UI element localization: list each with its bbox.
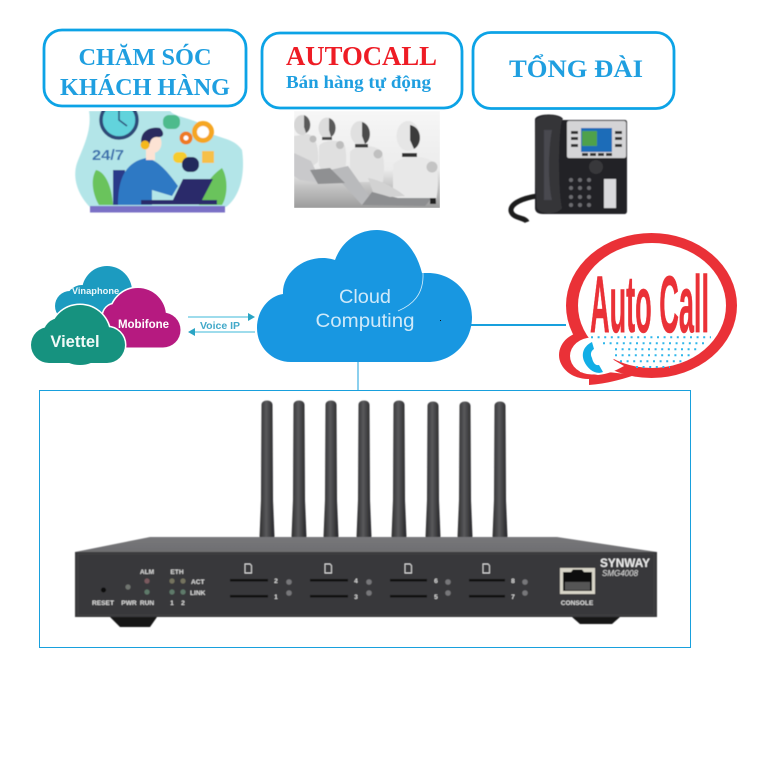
status LEDs xyxy=(125,578,528,596)
panel labels: LINK xyxy=(190,590,206,597)
panel labels: 6 xyxy=(434,578,438,585)
device frame xyxy=(40,390,690,648)
chassis xyxy=(75,537,657,617)
cloud: Vinaphone: Vinaphone xyxy=(72,286,119,296)
panel labels: RUN xyxy=(140,600,154,607)
console port xyxy=(560,568,595,594)
heading box: PBX: TỔNG ĐÀI xyxy=(509,54,643,83)
rubber feet xyxy=(110,617,620,627)
panel labels xyxy=(92,569,594,607)
cloud: Viettel: Viettel xyxy=(50,333,100,351)
connector: cloud to Auto Call xyxy=(470,324,566,326)
panel labels: PWR xyxy=(121,600,137,607)
icon: phone handset xyxy=(583,342,603,373)
panel labels: 1 xyxy=(274,594,278,601)
main cloud: Cloud Computing xyxy=(257,230,472,362)
heading box: customer care: KHÁCH HÀNG xyxy=(60,75,230,101)
reset button xyxy=(101,588,106,592)
heading box: customer care: CHĂM SÓC xyxy=(78,44,212,71)
heading box: autocall: Bán hàng tự động xyxy=(286,72,431,92)
panel labels: 7 xyxy=(511,594,515,601)
illustration: call center agent 24/7: 24/7 xyxy=(92,147,124,164)
cloud: Mobifone: Mobifone xyxy=(118,319,169,331)
network clouds: Vinaphone, Mobifone, Viettel xyxy=(31,266,180,365)
connector: cloud to device frame xyxy=(357,362,359,391)
photo: robots with laptops xyxy=(294,111,440,208)
panel labels: 4 xyxy=(354,578,358,585)
heading box: customer care xyxy=(44,30,246,106)
panel labels: RESET xyxy=(92,600,114,607)
panel labels: ALM xyxy=(140,569,155,576)
brand: Synway: SYNWAY xyxy=(600,558,650,570)
cloud: Viettel xyxy=(31,305,125,365)
model number: SMG4008 xyxy=(602,569,639,578)
device: Synway SMG4008 gateway xyxy=(75,400,657,627)
panel labels: 1 xyxy=(170,600,174,607)
cloud: Vinaphone xyxy=(55,266,132,321)
arrows and label: Voice IP xyxy=(188,313,255,336)
heading box: autocall xyxy=(262,33,462,108)
illustration: call center agent 24/7 xyxy=(75,102,243,212)
SIM icons xyxy=(245,564,490,573)
arrows and label: Voice IP: Voice IP xyxy=(200,320,240,332)
panel labels: 8 xyxy=(511,578,515,585)
panel labels: ETH xyxy=(170,569,184,576)
SIM slots xyxy=(230,579,505,598)
main cloud: Cloud Computing: Computing xyxy=(316,311,414,332)
heading box: PBX xyxy=(473,32,674,108)
logo: Auto Call speech bubble xyxy=(559,233,737,385)
panel labels: 2 xyxy=(274,578,278,585)
panel labels: CONSOLE xyxy=(561,600,594,607)
heading box: autocall: AUTOCALL xyxy=(286,41,437,71)
cloud: Mobifone xyxy=(103,288,180,348)
photo: desk IP phone xyxy=(511,114,627,222)
panel labels: 2 xyxy=(181,600,185,607)
panel labels: ACT xyxy=(191,579,205,586)
panel labels: 3 xyxy=(354,594,358,601)
antennas xyxy=(260,400,508,538)
main cloud: Cloud Computing: Cloud xyxy=(339,287,391,308)
panel labels: 5 xyxy=(434,594,438,601)
